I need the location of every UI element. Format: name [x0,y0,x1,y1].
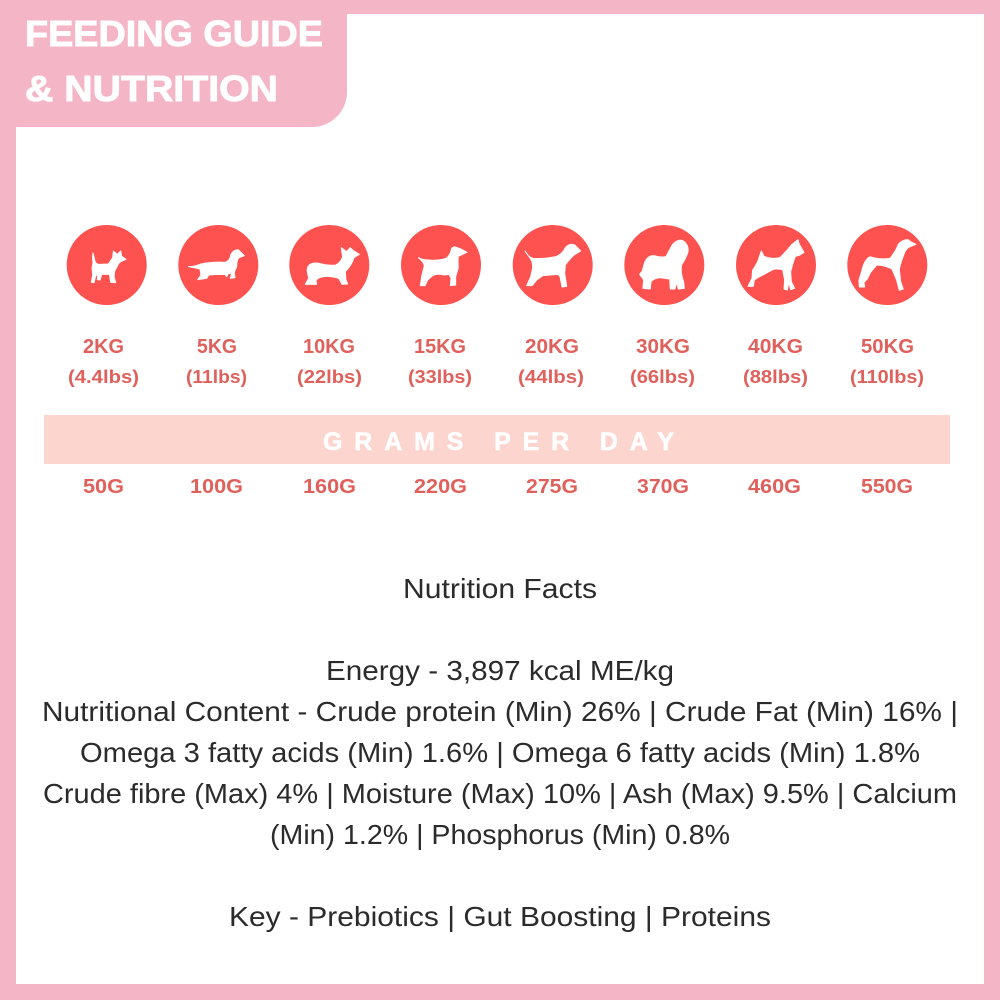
grams per day values: 160G [303,476,356,498]
icon: 20kg labrador [513,225,593,305]
grams per day values: 550G [861,476,913,498]
weight labels: (11lbs) [186,366,247,387]
weight labels: 5KG [197,336,237,358]
nutrition facts text: Nutritional Content - Crude protein (Min) 26% | Crude Fat (Min) 16% | [42,696,958,727]
weight labels: (4.4lbs) [68,366,139,387]
grams per day values: 370G [637,476,689,498]
grams per day values: 220G [414,476,467,498]
weight labels: (44lbs) [518,366,584,387]
weight labels: 50KG [861,336,914,358]
weight labels: (22lbs) [297,366,362,387]
icon: 50kg saluki [847,225,927,305]
title tab [0,0,347,140]
weight labels: (33lbs) [408,366,472,387]
grams per day values: 100G [190,476,243,498]
nutrition facts text: Omega 3 fatty acids (Min) 1.6% | Omega 6 fatty acids (Min) 1.8% [80,737,920,768]
icon: 5kg dachshund [178,225,258,305]
nutrition facts text: Crude fibre (Max) 4% | Moisture (Max) 10% | Ash (Max) 9.5% | Calcium [43,778,957,809]
grams per day band: GRAMS PER DAY [323,428,674,456]
nutrition facts text [42,573,958,932]
grams per day values [83,476,913,498]
nutrition facts text: (Min) 1.2% | Phosphorus (Min) 0.8% [270,819,730,850]
grams per day band [44,415,950,464]
title: & NUTRITION [25,68,278,109]
weight labels: (110lbs) [850,366,924,387]
nutrition facts text: Nutrition Facts [403,573,597,604]
weight labels: 2KG [83,336,124,358]
weight labels: 20KG [525,336,579,358]
weight labels: 30KG [636,336,690,358]
icon: 2kg chihuahua [67,225,147,305]
dog size icons [67,225,927,305]
title [25,13,323,109]
grams per day values: 275G [526,476,578,498]
grams per day values: 460G [748,476,801,498]
weight labels: 40KG [748,336,803,358]
icon: 40kg boxer [736,225,816,305]
weight labels [68,336,924,387]
grams per day values: 50G [83,476,124,498]
title: FEEDING GUIDE [25,13,323,54]
weight labels: (66lbs) [630,366,695,387]
weight labels: 10KG [303,336,355,358]
nutrition facts text: Key - Prebiotics | Gut Boosting | Proteins [229,901,771,932]
icon: 30kg doodle [624,225,704,305]
weight labels: 15KG [414,336,466,358]
icon: 10kg corgi [289,225,369,305]
weight labels: (88lbs) [743,366,808,387]
icon: 15kg bull terrier [401,225,481,305]
nutrition facts text: Energy - 3,897 kcal ME/kg [326,655,674,686]
